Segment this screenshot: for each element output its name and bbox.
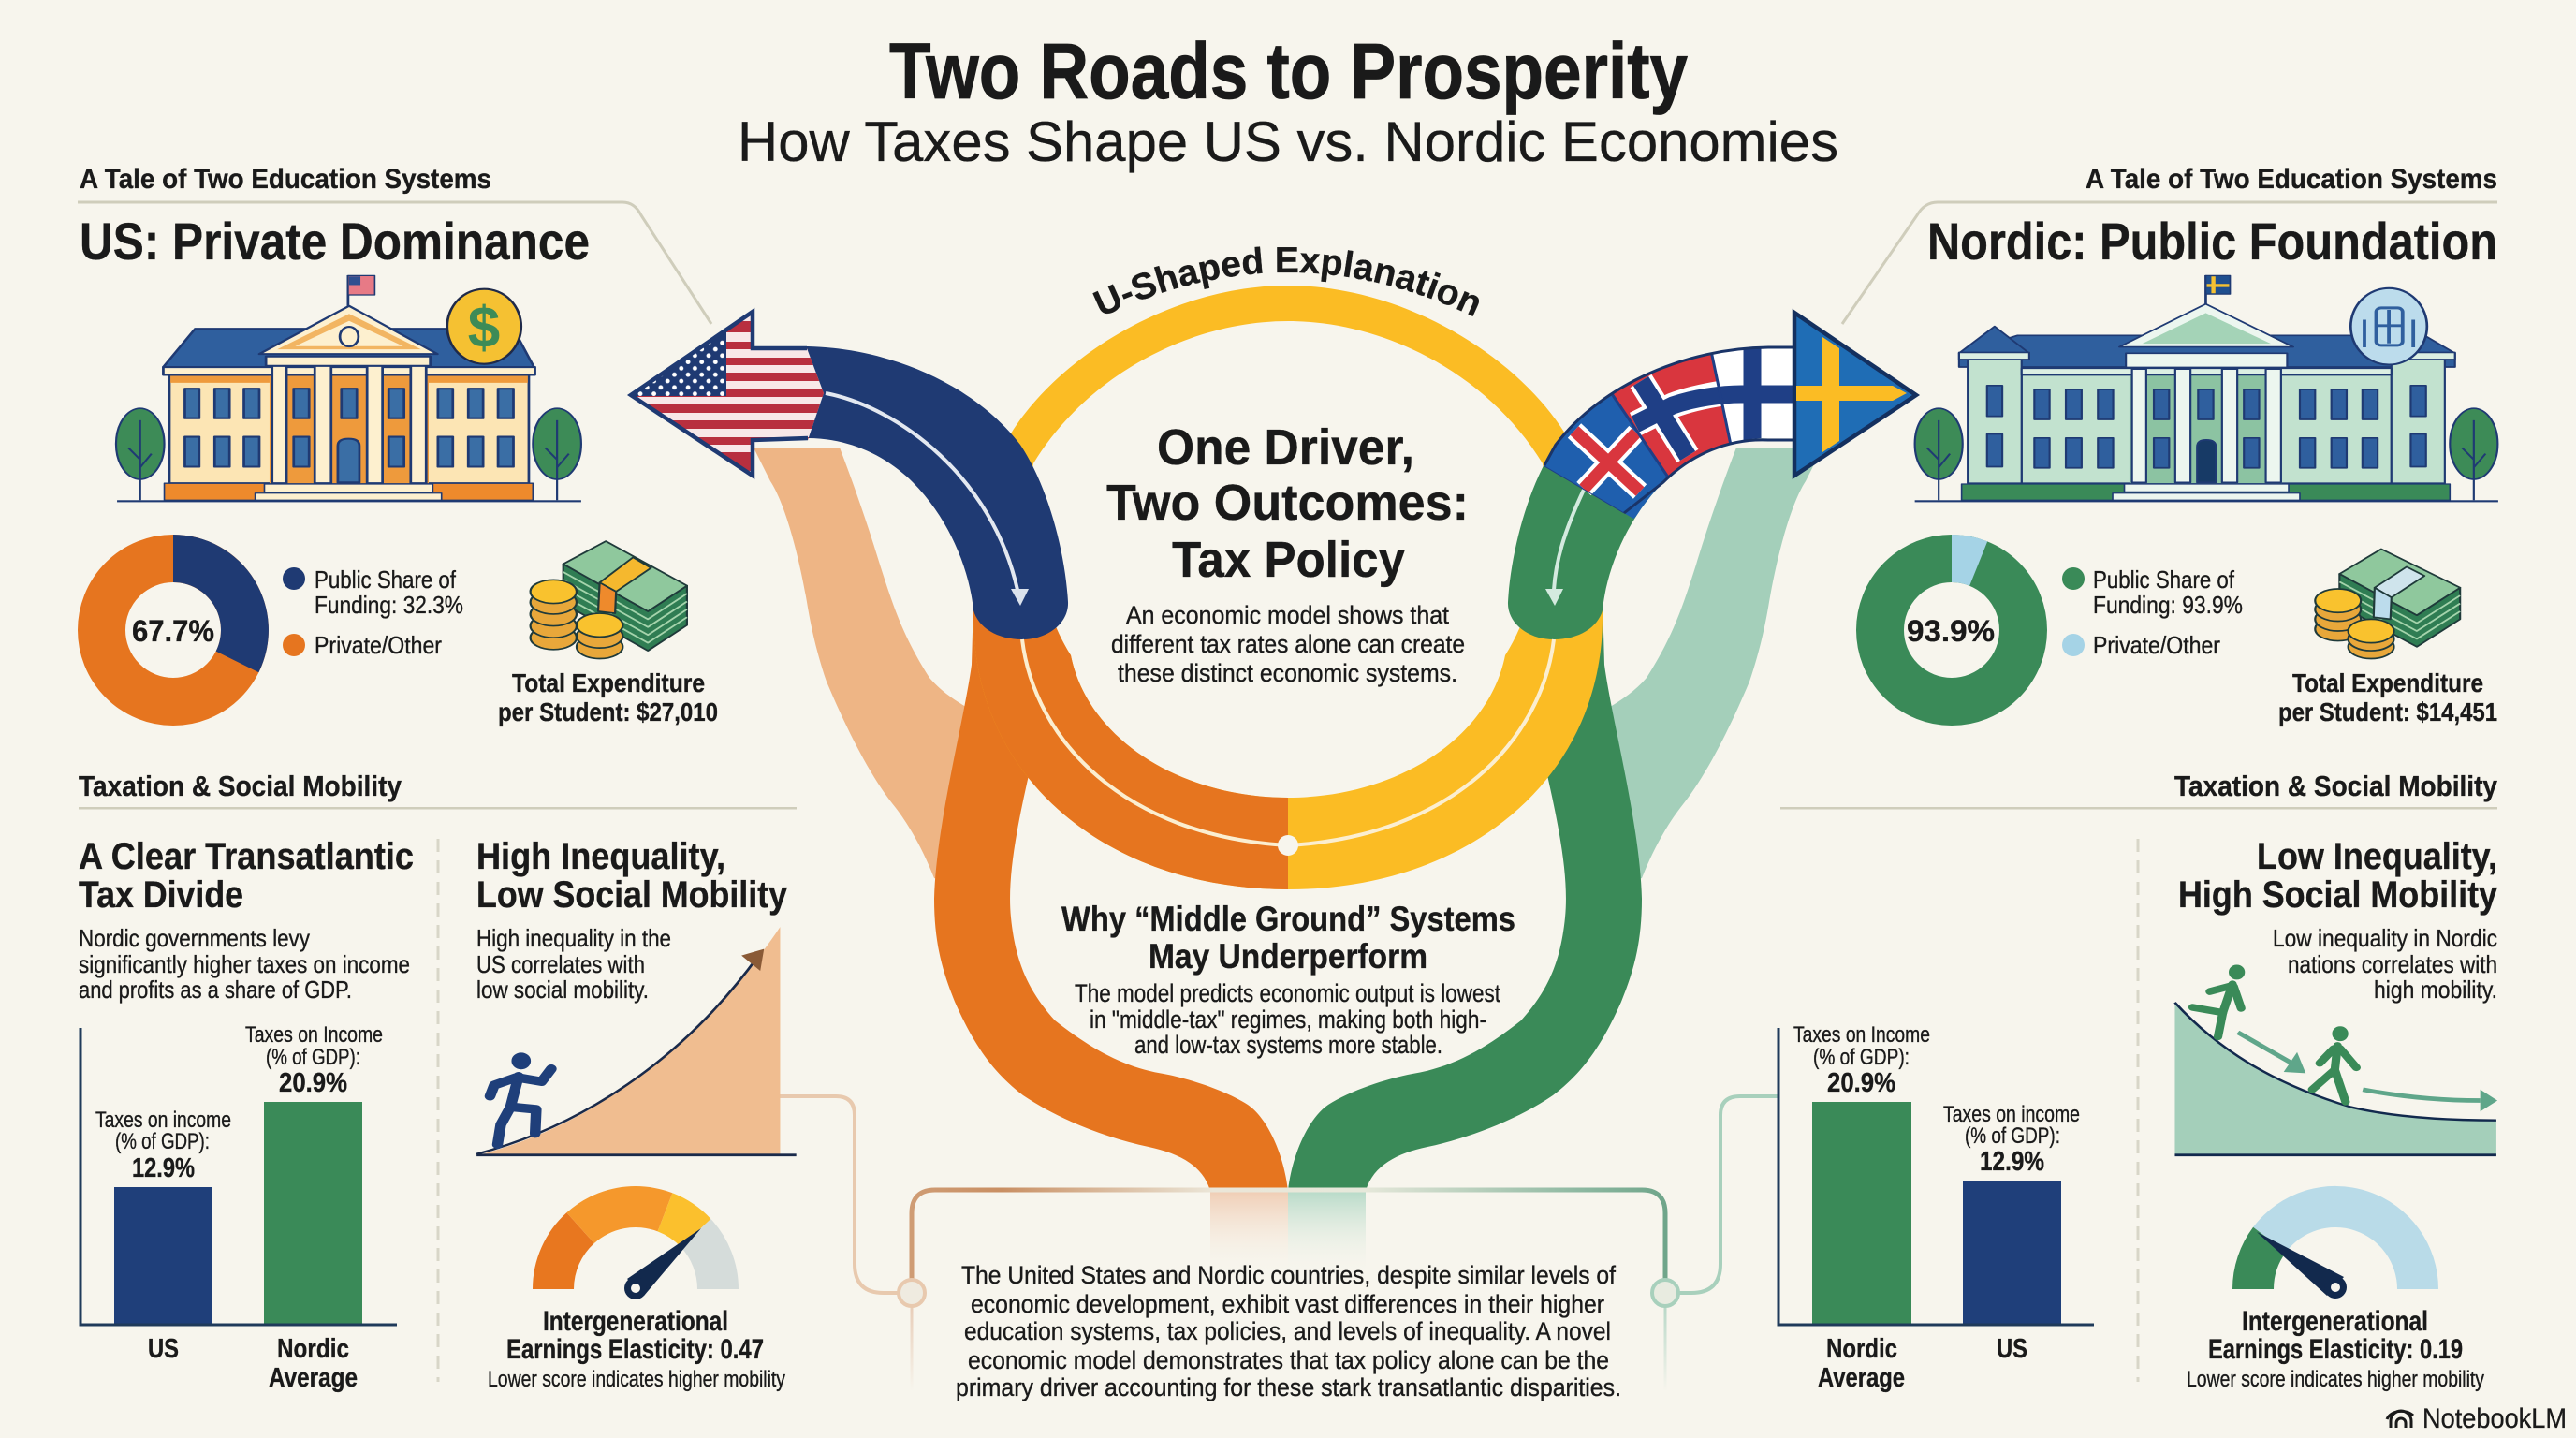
section label: Taxation & Social Mobility xyxy=(79,770,402,802)
falling curve with walking figures xyxy=(2174,968,2497,1156)
icon: US university building xyxy=(116,275,581,502)
center heading xyxy=(1106,419,1469,588)
heading: tax divide xyxy=(79,836,414,916)
section label: A Tale of Two Education Systems xyxy=(2086,164,2497,195)
heading: US: Private Dominance xyxy=(80,212,590,271)
legend: Public Share of xyxy=(2093,565,2235,594)
bar chart: 12.9% xyxy=(1980,1147,2044,1177)
flow lines xyxy=(826,393,1584,845)
donut chart: 67.7% xyxy=(132,614,214,648)
expenditure label: per Student: $14,451 xyxy=(2278,697,2497,726)
donut chart xyxy=(1880,535,2024,702)
bar chart: Taxes on Income xyxy=(245,1022,383,1048)
panel: US taxation and mobility xyxy=(79,770,797,1393)
Nordic flags on arrow band xyxy=(1535,313,1916,519)
panel: Nordic taxation and mobility xyxy=(1778,770,2498,1393)
expenditure label: per Student: $27,010 xyxy=(498,697,718,726)
center explanation: different tax rates alone can create xyxy=(1111,630,1465,658)
text: tax divide: and profits as a share of GDP. xyxy=(79,976,352,1004)
bar chart: Average xyxy=(269,1363,358,1393)
text: tax divide xyxy=(79,924,410,1004)
heading: high inequality xyxy=(476,836,788,916)
heading: tax divide: Tax Divide xyxy=(79,874,243,916)
text: tax divide: significantly higher taxes on income xyxy=(79,950,410,978)
donut chart xyxy=(101,535,269,702)
subtitle: How Taxes Shape US vs. Nordic Economies xyxy=(738,110,1838,173)
heading: tax divide: A Clear Transatlantic xyxy=(79,836,414,877)
bar chart: Nordic xyxy=(277,1334,349,1364)
center explanation: these distinct economic systems. xyxy=(1118,659,1457,687)
text: low inequality xyxy=(2273,924,2497,1004)
gauge caption: Lower score indicates higher mobility xyxy=(2187,1367,2484,1392)
heading: high inequality: High Inequality, xyxy=(476,836,725,877)
navy arrow band xyxy=(754,346,1068,639)
pale orange ribbon xyxy=(754,448,973,889)
bar chart: 20.9% xyxy=(1827,1068,1895,1098)
gauge: earnings elasticity 0.19 xyxy=(2232,1186,2438,1299)
leader line xyxy=(78,202,711,324)
text: tax divide: Nordic governments levy xyxy=(79,924,310,952)
bar chart: Taxes on income xyxy=(1943,1102,2080,1127)
text: low inequality: high mobility. xyxy=(2374,976,2497,1004)
middle ground heading: Why “Middle Ground” Systems xyxy=(1061,900,1515,938)
heading: low inequality: High Social Mobility xyxy=(2178,874,2498,916)
legend: Private/Other xyxy=(315,631,442,659)
expenditure label: Total Expenditure xyxy=(512,668,705,697)
summary text: The United States and Nordic countries, despite similar levels of xyxy=(961,1261,1616,1289)
text: high inequality: High inequality in the xyxy=(476,924,671,952)
U-shaped label text: U-Shaped Explanation xyxy=(1092,246,1479,316)
icon: money and coins xyxy=(531,541,687,658)
orange leg xyxy=(934,599,1288,1191)
heading: high inequality: Low Social Mobility xyxy=(476,874,788,916)
summary text: economic development, exhibit vast differences in their higher xyxy=(971,1290,1604,1318)
orange half of ring xyxy=(973,610,1288,889)
arc label xyxy=(1095,272,1481,320)
pale green ribbon xyxy=(1603,448,1822,889)
summary card xyxy=(899,1190,1678,1401)
legend: Funding: 32.3% xyxy=(315,591,463,619)
bar chart: 12.9% xyxy=(132,1153,195,1183)
heading: Nordic: Public Foundation xyxy=(1927,212,2497,271)
Swedish flag arrow head xyxy=(1794,313,1916,476)
center heading: One Driver, xyxy=(1157,419,1414,476)
right connector xyxy=(1678,1096,1778,1293)
rising curve with climbing figure xyxy=(476,927,797,1156)
bar chart xyxy=(80,1022,397,1393)
text: high inequality: US correlates with xyxy=(476,950,645,978)
summary text: education systems, tax policies, and levels of inequality. A novel xyxy=(964,1317,1611,1345)
legend: Public Share of xyxy=(315,565,457,594)
center explanation xyxy=(1111,601,1465,687)
bar chart: (% of GDP): xyxy=(1813,1045,1910,1070)
middle ground text: in "middle-tax" regimes, making both high- xyxy=(1090,1005,1486,1034)
icon: dollar sign: $ xyxy=(468,296,500,360)
title xyxy=(738,27,1838,173)
gauge caption: Earnings Elasticity: 0.47 xyxy=(506,1334,764,1365)
panel: US education xyxy=(78,164,718,726)
summary text xyxy=(956,1261,1621,1401)
bar chart: (% of GDP): xyxy=(266,1045,360,1070)
donut chart: 93.9% xyxy=(1907,614,1995,648)
gauge caption xyxy=(488,1306,785,1392)
icon: money and coins xyxy=(2315,549,2460,658)
panel: Nordic education xyxy=(1842,164,2498,726)
leader line xyxy=(1842,202,2497,324)
legend xyxy=(283,565,463,659)
center heading: Two Outcomes: xyxy=(1106,475,1469,531)
bar chart xyxy=(1778,1022,2094,1393)
green leg xyxy=(1288,599,1642,1191)
middle ground text xyxy=(1075,979,1500,1059)
expenditure label: Total Expenditure xyxy=(2292,668,2483,697)
center heading: Tax Policy xyxy=(1172,532,1405,588)
section label: A Tale of Two Education Systems xyxy=(80,164,491,195)
middle ground heading: May Underperform xyxy=(1149,937,1427,976)
bar chart: (% of GDP): xyxy=(115,1129,210,1154)
summary text: primary driver accounting for these stark transatlantic disparities. xyxy=(956,1373,1621,1401)
text: high inequality xyxy=(476,924,671,1004)
gauge caption xyxy=(2187,1306,2484,1392)
text: low inequality: nations correlates with xyxy=(2288,950,2497,978)
flow arrowheads and junction xyxy=(1011,589,1563,856)
summary text: economic model demonstrates that tax policy alone can be the xyxy=(968,1346,1609,1374)
middle ground text: The model predicts economic output is lowest xyxy=(1075,979,1500,1007)
green arrow band xyxy=(1508,346,1822,639)
gauge caption: Intergenerational xyxy=(2242,1306,2428,1337)
bar chart: Average xyxy=(1818,1363,1905,1393)
bar chart: 20.9% xyxy=(279,1068,347,1098)
central U-shaped flow diagram xyxy=(590,246,1954,1208)
bar chart: Taxes on income xyxy=(95,1108,231,1133)
expenditure label xyxy=(2278,668,2497,726)
heading: low inequality: Low Inequality, xyxy=(2257,836,2497,877)
bar chart: Taxes on Income xyxy=(1793,1022,1930,1048)
gauge caption: Intergenerational xyxy=(543,1306,728,1337)
gauge: earnings elasticity 0.47 xyxy=(533,1186,739,1299)
legend: Private/Other xyxy=(2093,631,2220,659)
center explanation: An economic model shows that xyxy=(1126,601,1449,629)
bar chart: US xyxy=(148,1334,179,1364)
title: Two Roads to Prosperity xyxy=(889,27,1688,115)
text: low inequality: Low inequality in Nordic xyxy=(2273,924,2497,952)
left connector xyxy=(780,1096,899,1293)
yellow ring xyxy=(973,286,1603,889)
middle ground heading xyxy=(1061,900,1515,976)
middle ground text: and low-tax systems more stable. xyxy=(1134,1031,1442,1059)
heading: low inequality xyxy=(2178,836,2498,916)
gauge caption: Earnings Elasticity: 0.19 xyxy=(2208,1334,2463,1365)
legend: Funding: 93.9% xyxy=(2093,591,2243,619)
section label: Taxation & Social Mobility xyxy=(2174,770,2498,802)
gauge caption: Lower score indicates higher mobility xyxy=(488,1367,785,1392)
legend xyxy=(2062,565,2243,659)
bar chart: (% of GDP): xyxy=(1965,1123,2060,1149)
icon: Nordic university building xyxy=(1915,275,2498,502)
text: high inequality: low social mobility. xyxy=(476,976,649,1004)
bar chart: Nordic xyxy=(1826,1334,1897,1364)
US flag arrow xyxy=(627,309,828,479)
expenditure label xyxy=(498,668,718,726)
bar chart: US xyxy=(1997,1334,2027,1364)
